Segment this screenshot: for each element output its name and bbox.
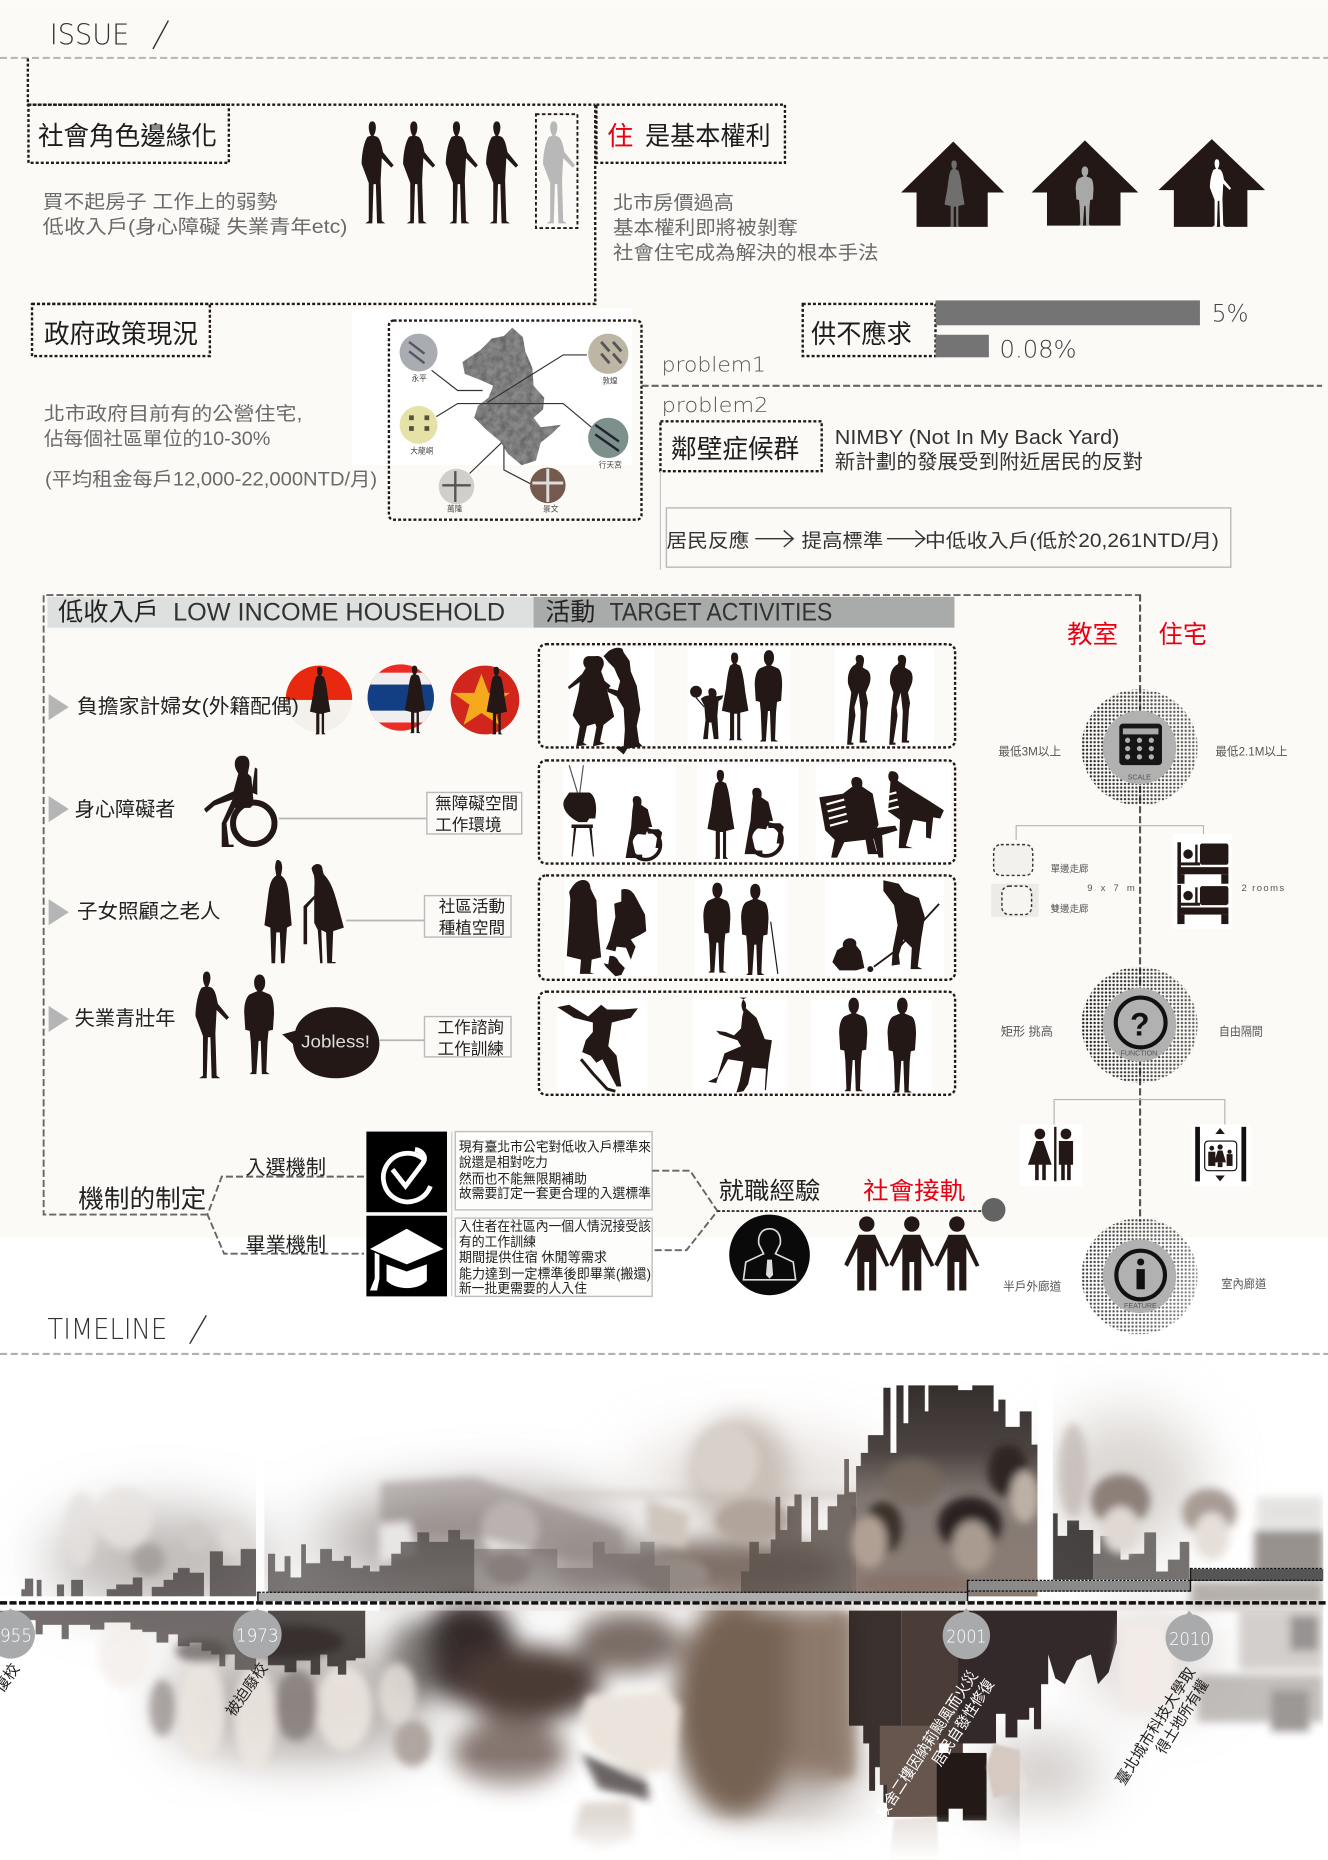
- heading box: 住 是基本權利: 是基本權利: [645, 121, 771, 151]
- label: 負擔家計婦女(外籍配偶): [77, 695, 299, 718]
- function labels: 自由隔間: [1219, 1025, 1263, 1039]
- NIMBY description: NIMBY (Not In My Back Yard): [835, 427, 1119, 449]
- silhouette: seated reader: [708, 998, 772, 1092]
- year marker: 2001: [943, 1608, 990, 1659]
- icon: check mark: [366, 1132, 447, 1212]
- NIMBY description: 新計劃的發展受到附近居民的反對: [835, 451, 1143, 474]
- event: 2010 land ownership: 臺北城市科技大學取: [1111, 1663, 1199, 1788]
- heading: 機制的制定: 機制的制定: [78, 1185, 206, 1213]
- text box: graduation rule: 新一批更需要的人入住: [459, 1281, 587, 1296]
- icon: house with figure: [1032, 140, 1138, 226]
- icon: wheelchair user: [204, 756, 274, 847]
- row: disabled people: [49, 756, 522, 847]
- heading box: 鄰壁症候群: [660, 421, 822, 471]
- text box: admission rule: 然而也不能無限期補助: [459, 1171, 587, 1187]
- soft photo tones: [47, 1411, 1215, 1820]
- axis band: [0, 1596, 1328, 1611]
- panel: target groups header: 活動: [545, 599, 595, 627]
- connector to outcome: [652, 1171, 717, 1250]
- callout: accessible space: [427, 792, 522, 834]
- callout: job counselling: 工作訓練: [438, 1040, 504, 1059]
- arrow marker: [49, 1006, 69, 1032]
- women to the right of strip: [1091, 1474, 1150, 1526]
- text box: graduation rule: 有的工作訓練: [459, 1235, 536, 1250]
- description text: (平均租金每戶12,000-22,000NTD/月): [45, 468, 377, 490]
- arrow marker: [49, 694, 69, 720]
- event: forced closure: 被迫廢校: [221, 1659, 272, 1720]
- panel: target groups header: [47, 597, 954, 628]
- description text: [44, 403, 377, 490]
- scale labels: [998, 745, 1288, 759]
- heading: 教室: 教室: [1067, 621, 1118, 649]
- panel: activities row 4: [539, 992, 955, 1095]
- year marker: 1973: [233, 1608, 282, 1659]
- heading box: 鄰壁症候群: 鄰壁症候群: [671, 434, 799, 464]
- text box: graduation rule: 能力達到一定標準後即畢業(搬還): [459, 1266, 651, 1282]
- skyline above the axis: [21, 1385, 1189, 1596]
- label: 畢業機制: 畢業機制: [245, 1233, 326, 1256]
- site labels: 行天宮: [599, 460, 622, 470]
- panel: target groups header: TARGET ACTIVITIES: [609, 599, 832, 627]
- site labels: 永平: [411, 373, 427, 383]
- upper paper panel: [0, 0, 1328, 1237]
- icon: three people holding hands: [844, 1216, 979, 1290]
- text box: graduation rule: 入住者在社區內一個人情況接受該: [459, 1218, 651, 1234]
- arrow marker: [49, 796, 69, 822]
- description text: 買不起房子 工作上的弱勢: [43, 191, 277, 213]
- icon: two men: [196, 972, 274, 1078]
- callout: accessible space: 無障礙空間: [435, 794, 518, 813]
- site labels: 景文: [543, 503, 559, 513]
- heading box: 社會角色邊緣化: 社會角色邊緣化: [38, 121, 217, 151]
- row: elderly: [49, 860, 511, 963]
- icon: house with man: [1158, 139, 1265, 227]
- scale labels: 最低3M以上: [998, 745, 1061, 759]
- icon: bunk beds: [1173, 834, 1232, 929]
- feature node: [1081, 1218, 1198, 1334]
- heading box: 供不應求: [803, 304, 936, 356]
- silhouette: standing pair: [847, 655, 913, 745]
- scale node: [1081, 689, 1198, 806]
- flow box: residents reaction: 提高標準: [802, 530, 883, 552]
- dashed frame of target section: [44, 595, 1141, 1215]
- skyline below the axis: [0, 1611, 1176, 1860]
- branch lines: [208, 1177, 364, 1254]
- NIMBY description: [835, 427, 1143, 474]
- label: employment experience: 就職經驗: [719, 1178, 821, 1205]
- icon: restroom sign: [1020, 1124, 1083, 1186]
- silhouette: dancing couple: [568, 648, 643, 755]
- heading box: 供不應求: 供不應求: [811, 319, 912, 349]
- label: 失業青壯年: [75, 1007, 175, 1030]
- text box: admission rule: 說還是相對吃力: [459, 1154, 548, 1170]
- label: 子女照顧之老人: [77, 900, 221, 923]
- icon: worker portrait: [729, 1215, 810, 1295]
- heading: ISSUE: ISSUE: [50, 18, 129, 51]
- callout: job counselling: [424, 1017, 511, 1058]
- icon: elevator sign: [1192, 1124, 1251, 1186]
- text box: graduation rule: [455, 1218, 652, 1296]
- label: classroom size: 9 x 7 m: [1087, 883, 1135, 894]
- text box: admission rule: [455, 1132, 652, 1210]
- speech bubble: Jobless: Jobless!: [301, 1031, 370, 1051]
- heading: 住宅: 住宅: [1158, 621, 1207, 649]
- panel: target groups header: LOW INCOME HOUSEHOLD: [173, 599, 505, 627]
- panel: target groups header: 低收入戶: [58, 599, 159, 627]
- panel: problem 1 supply and demand: [662, 300, 1249, 377]
- heading box: 社會角色邊緣化: [28, 105, 229, 163]
- label: room count: 2 rooms: [1241, 883, 1284, 894]
- heading box: 政府政策現況: [32, 304, 210, 356]
- young group above axis: [65, 1492, 96, 1568]
- panel: timeline axis: [0, 1568, 1328, 1821]
- icon: excluded grey person: [536, 114, 577, 228]
- icon: four standing people: [362, 121, 518, 223]
- description text: 社會住宅成為解決的根本手法: [613, 242, 879, 264]
- event: 2010 land ownership: 得土地所有權: [1152, 1676, 1212, 1757]
- row: unemployed: [49, 972, 511, 1078]
- silhouette: people on bench: [819, 771, 944, 858]
- dotted connector network: [28, 58, 595, 304]
- callout: accessible space: 工作環境: [435, 815, 502, 834]
- stage bars: [258, 1568, 1323, 1601]
- panel: social marginalisation: [28, 105, 577, 238]
- description text: 佔每個社區單位的10-30%: [44, 428, 270, 450]
- women faces in the skyline: [851, 1423, 1237, 1596]
- panel: housing is a basic right: [596, 105, 1265, 264]
- vertical photo borders: [256, 1364, 1053, 1595]
- silhouette: elderly couple walking: [703, 883, 778, 975]
- year marker: 2010: [1166, 1611, 1213, 1662]
- callout: community activity: 種植空間: [439, 919, 505, 938]
- text box: admission rule: 故需要訂定一套更合理的入選標準: [459, 1186, 651, 1201]
- description text: 基本權利即將被剝奪: [613, 217, 798, 239]
- function labels: [1001, 1025, 1263, 1039]
- label: 身心障礙者: [75, 798, 175, 821]
- arrow: [755, 530, 793, 547]
- function node: ?: [1130, 1007, 1150, 1043]
- silhouette: helper with wheelchair: [707, 770, 784, 859]
- bar chart: 0.08 percent: 0.08%: [1000, 335, 1077, 363]
- site labels: 萬隆: [447, 503, 463, 513]
- bar chart: 5 percent: [936, 300, 1249, 328]
- text box: graduation rule: 期間提供住宿 休閒等需求: [459, 1249, 607, 1265]
- bar chart: 0.08 percent: [936, 335, 1077, 363]
- silhouette: television and wheelchair viewer: [563, 765, 662, 860]
- feature labels: [1003, 1277, 1266, 1293]
- sharper figure details: [65, 1426, 866, 1850]
- label: problem1: problem1: [662, 353, 766, 377]
- icon: corridor plans: 單邊走廊: [1051, 863, 1088, 875]
- callout: community activity: [424, 896, 511, 938]
- speech bubble: Jobless: [282, 1007, 379, 1078]
- event: 2001 fire: 居民自發性修復: [929, 1676, 998, 1769]
- arrow marker: [49, 899, 69, 925]
- site labels: [410, 373, 622, 513]
- arrow: [887, 530, 925, 547]
- function labels: 矩形 挑高: [1001, 1025, 1053, 1039]
- description text: 低收入戶(身心障礙 失業青年etc): [43, 216, 347, 238]
- panel: activities row 1: [539, 644, 955, 755]
- silhouette: family: [690, 650, 782, 741]
- label: 入選機制: 入選機制: [245, 1156, 326, 1179]
- heading: TIMELINE: TIMELINE: [47, 1313, 167, 1346]
- heading box: 住 是基本權利: [596, 105, 785, 163]
- year marker: 1955: [0, 1608, 35, 1659]
- label: social integration: 社會接軌: [863, 1178, 965, 1205]
- scale labels: 最低2.1M以上: [1215, 745, 1288, 759]
- silhouette: child and gardener: [832, 880, 939, 972]
- main figures: [389, 1417, 854, 1817]
- scale node: SCALE: [1128, 773, 1151, 781]
- flow box: residents reaction: [666, 508, 1231, 567]
- icon: house with woman: [901, 142, 1004, 227]
- year marker: 1973: 1973: [236, 1625, 279, 1646]
- year marker: 2001: 2001: [946, 1627, 987, 1648]
- panel: activities row 2: [539, 760, 955, 864]
- map of public housing: [352, 309, 641, 520]
- label: problem2: problem2: [662, 393, 768, 417]
- bar chart: 5 percent: 5%: [1212, 300, 1249, 328]
- silhouette: skateboarder: [557, 1005, 638, 1091]
- site labels: 敦煌: [602, 375, 618, 385]
- icon: corridor plans: 雙邊走廊: [1051, 903, 1088, 915]
- feature node: FEATURE: [1124, 1302, 1157, 1310]
- description text: [613, 192, 879, 264]
- function node: [1081, 967, 1198, 1083]
- year marker: 2010: 2010: [1169, 1629, 1211, 1650]
- panel: government policy: [32, 304, 641, 520]
- event: 2001 fire: 校舍二樓因納莉颱風而火災: [873, 1667, 982, 1821]
- flag: Indonesia: [285, 664, 356, 736]
- feature labels: 半戶外廊道: [1003, 1279, 1061, 1293]
- building photo circles: [400, 334, 628, 504]
- row: household women: [49, 662, 519, 736]
- description text: 北市政府目前有的公營住宅,: [44, 403, 302, 425]
- heading box: 政府政策現況: 政府政策現況: [44, 319, 198, 349]
- text box: admission rule: 現有臺北市公宅對低收入戶標準來: [459, 1139, 651, 1155]
- young group below axis: [98, 1621, 151, 1688]
- function node: FUNCTION: [1121, 1050, 1157, 1058]
- panel: activities row 3: [539, 875, 955, 980]
- silhouette: two men standing: [839, 998, 916, 1092]
- description text: [43, 191, 347, 238]
- site labels: 大龍峒: [410, 445, 434, 455]
- flow box: residents reaction: 居民反應: [666, 529, 749, 552]
- description text: 北市房價過高: [613, 192, 734, 214]
- panel: classroom versus housing comparison: [991, 594, 1288, 1334]
- heading box: 住 是基本權利: 住: [607, 121, 633, 151]
- flag: Thailand: [365, 662, 436, 733]
- bottom and edge fades: [0, 1726, 1328, 1860]
- flow box: residents reaction: 中低收入戶(低於20,261NTD/月): [925, 530, 1219, 552]
- building at the right edge: [1190, 1364, 1328, 1860]
- flag: Vietnam: [448, 664, 519, 736]
- panel: mechanism design: [78, 1132, 984, 1296]
- icon: elderly couple: [264, 860, 344, 963]
- panel: problem 2 NIMBY: [660, 393, 1231, 570]
- silhouette: two women and pet: [567, 880, 646, 976]
- callout: job counselling: 工作諮詢: [438, 1018, 504, 1037]
- callout: community activity: 社區活動: [439, 897, 505, 916]
- icon: corridor plans: [991, 845, 1088, 917]
- icon: graduation cap: [366, 1216, 447, 1296]
- feature labels: 室內廊道: [1221, 1277, 1266, 1291]
- map silhouette: [462, 328, 561, 465]
- end node: [982, 1198, 1005, 1222]
- panel: historical photo collage: [0, 1364, 1328, 1860]
